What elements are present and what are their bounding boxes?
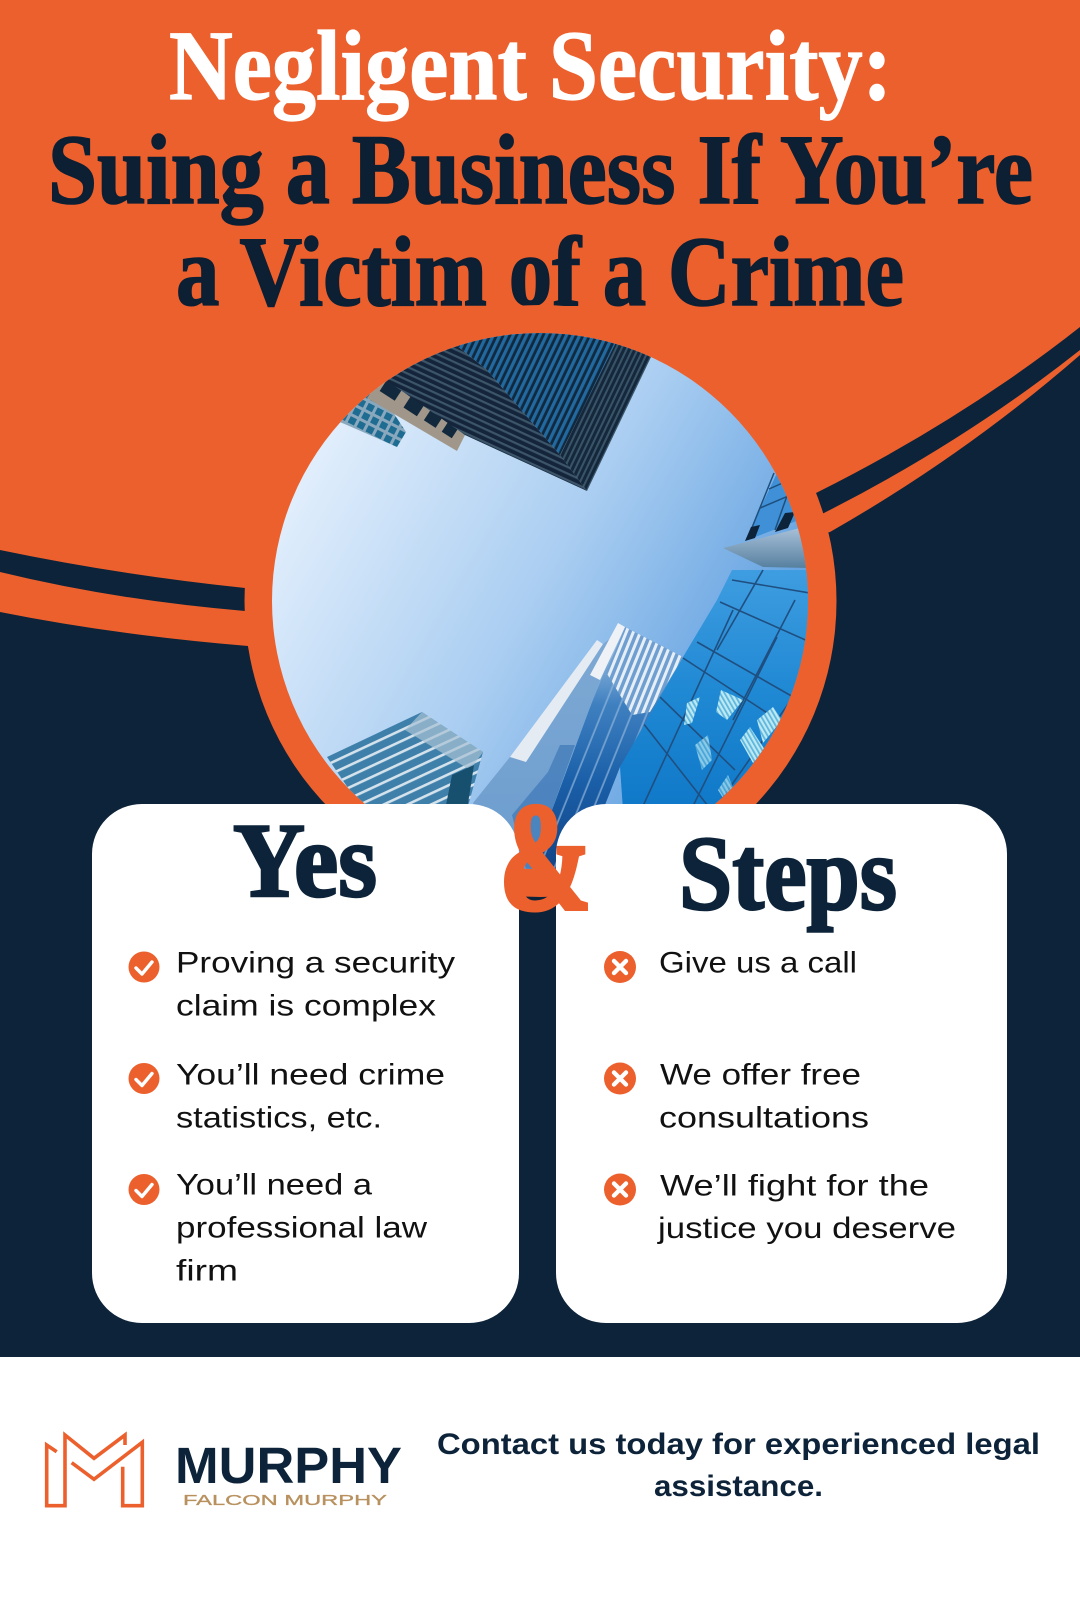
call to action bbox=[437, 1428, 1040, 1503]
list item 3: You’ll need a bbox=[176, 1168, 372, 1202]
glass building right bbox=[620, 570, 812, 810]
panel: Steps bbox=[556, 804, 1007, 1323]
circular photo ring bbox=[244, 305, 836, 897]
dark tower: left face bbox=[387, 346, 587, 491]
icon: M mark bbox=[47, 1435, 142, 1506]
icon: check bbox=[128, 1174, 160, 1205]
icon: cross bbox=[604, 1174, 636, 1206]
circular photo: skyscrapers against blue sky bbox=[270, 300, 812, 885]
list item 1 bbox=[128, 946, 455, 1022]
left navy swoosh bbox=[0, 550, 245, 611]
title line 3: a Victim of a Crime bbox=[176, 216, 904, 327]
footer band bbox=[0, 1357, 1080, 1600]
list item 3 bbox=[604, 1170, 956, 1245]
call to action: assistance. bbox=[654, 1470, 823, 1503]
list item 1: Give us a call bbox=[659, 946, 857, 980]
icon: check bbox=[128, 952, 160, 982]
list item 2: consultations bbox=[659, 1102, 869, 1134]
panel: Yes bbox=[92, 802, 519, 1323]
list item 1: claim is complex bbox=[176, 990, 436, 1022]
heading: Steps: Steps bbox=[679, 815, 897, 932]
centre tower: main face bbox=[542, 627, 683, 869]
list item 1 bbox=[604, 946, 857, 983]
card background bbox=[556, 804, 1007, 1323]
logo: Falcon Murphy bbox=[47, 1435, 402, 1509]
list item 3 bbox=[128, 1168, 427, 1288]
list item 2: statistics, etc. bbox=[176, 1102, 382, 1134]
centre tower: white strips bbox=[510, 640, 603, 762]
beige side of tower bbox=[367, 378, 465, 451]
list item 2 bbox=[604, 1058, 869, 1134]
list item 3: justice you deserve bbox=[657, 1212, 956, 1245]
icon: cross bbox=[604, 1062, 636, 1094]
card background bbox=[92, 804, 519, 1323]
background: navy lower section bbox=[0, 355, 1080, 1357]
list item 3: firm bbox=[176, 1254, 238, 1288]
ampersand: & bbox=[499, 771, 592, 943]
ledge bbox=[723, 528, 810, 568]
list item 2 bbox=[128, 1058, 445, 1134]
list item 1: Proving a security bbox=[176, 946, 455, 980]
title bbox=[48, 10, 1033, 327]
heading: Yes: Yes bbox=[233, 802, 377, 919]
list item 3: We’ll fight for the bbox=[660, 1170, 929, 1202]
dark tower: blue face bbox=[458, 333, 616, 455]
list item 2: We offer free bbox=[660, 1058, 861, 1092]
upper right building bbox=[745, 474, 796, 541]
list item 3: professional law bbox=[176, 1212, 427, 1244]
icon: cross bbox=[604, 951, 636, 983]
wordmark: MURPHY bbox=[175, 1437, 402, 1494]
dark tower: outer edge bbox=[560, 344, 651, 491]
icon: check bbox=[128, 1063, 160, 1094]
small blue building top left bbox=[340, 388, 406, 447]
lower left building bbox=[327, 712, 483, 810]
title line 1: Negligent Security: bbox=[169, 10, 892, 121]
call to action: Contact us today for experienced legal bbox=[437, 1428, 1040, 1461]
centre tower: light glass face bbox=[473, 640, 609, 869]
sub-wordmark: FALCON MURPHY bbox=[183, 1493, 388, 1509]
right navy swoosh bbox=[816, 327, 1080, 517]
list item 2: You’ll need crime bbox=[176, 1058, 445, 1092]
centre tower: white striped top bbox=[606, 627, 683, 715]
